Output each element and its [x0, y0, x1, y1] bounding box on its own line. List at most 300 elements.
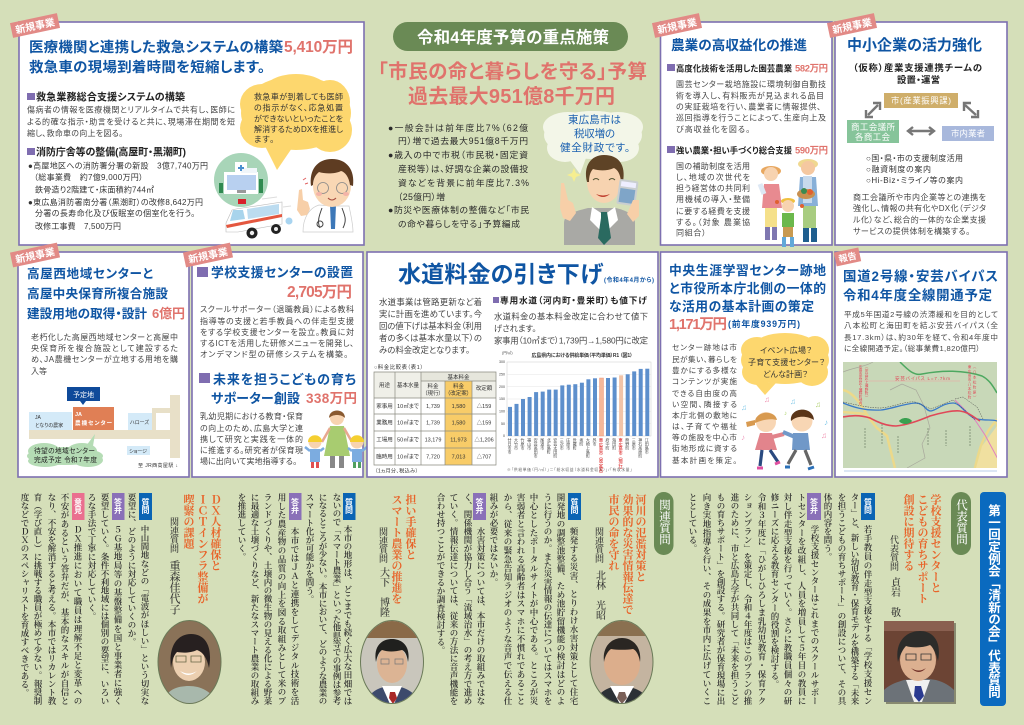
table: rate comparison: （現行）	[425, 389, 441, 397]
heading: (令和4年4月から)	[604, 276, 654, 284]
text: body columns: ろな手法で丁寧に対応していく。	[86, 493, 97, 620]
column article: DX talent and ICT	[20, 492, 222, 706]
question badge: 質問	[570, 497, 579, 514]
text block: スクールサポーター（退職教員）による教科	[200, 304, 354, 314]
bar chart: unit supply price: ※「供給単価（円/㎥）」＝「給水収益（水道料金収入）」/「有収水量」	[507, 467, 632, 472]
text block	[379, 297, 483, 355]
diagram: partnership: 商工会議所	[851, 122, 896, 132]
text: body columns: 頻発する災害、とりわけ水害対策として住宅	[569, 526, 579, 705]
table: rate comparison: 料金	[427, 382, 439, 390]
text block: horticulture	[667, 62, 828, 134]
text block: horticulture: の実証栽培を行い、農業者に情報提供、	[676, 102, 821, 112]
text: body columns: 用した農産物の品質の向上を図る取組みとして米のブ	[276, 493, 287, 705]
question badge	[343, 493, 356, 520]
badge: new project	[827, 13, 877, 38]
table: rate comparison: 基本料金	[447, 373, 470, 381]
bar chart: unit supply price: 坂町	[579, 437, 584, 446]
bar chart: unit supply price: 大崎上島町	[586, 437, 591, 458]
heading: 水道料金の引き下げ	[398, 261, 604, 287]
text block: private water: げされます。	[494, 324, 536, 334]
text block: 民が集い、暮らしを	[672, 354, 737, 364]
text block: に全線開通予定。（総事業費1,820億円）	[844, 343, 980, 353]
text block: 実に計画を進めています。今	[379, 309, 483, 319]
text block: fire stations: 改修工事費 7,500万円	[35, 221, 121, 231]
text block: 乳幼児期における教育・保育	[200, 411, 303, 421]
heading: 高屋中央保育所複合施設	[27, 286, 168, 301]
text block: 八本松町と海田町を結ぶ安芸バイパス（全	[844, 320, 998, 330]
text block: support system: 縮し、救命車の向上を図る。	[27, 128, 123, 138]
bar chart: unit supply price: 福山市	[527, 437, 532, 451]
map: bypass route: 広島市安芸区上瀬野町地内	[858, 365, 863, 406]
text block: 平成5年国道2号線の渋滞緩和を目的として	[844, 309, 998, 319]
title and name	[888, 493, 942, 618]
column article: school support question	[688, 492, 971, 706]
heading: child-rearing supporter	[199, 372, 357, 406]
text block: horticulture: 高度化技術を活用した園芸農業	[676, 64, 793, 74]
text block	[200, 411, 303, 466]
photo: Sadaiwa	[884, 621, 956, 704]
title and name: 効果的な災害情報伝達で	[621, 493, 634, 615]
heading: emergency system	[29, 38, 353, 76]
text: body columns: 害弱者と言われる高齢者はスマホに不慣れであること	[515, 492, 526, 705]
heading: school support center: 2,705万円	[287, 284, 352, 301]
text: body columns: 本市ではＪＡと連携をしてデジタル技術を活	[290, 526, 300, 706]
text block: farm support: 強い農業・担い手づくり総合支援	[676, 146, 793, 156]
illustration: dancing children	[741, 395, 828, 469]
text block: をする学校支援センターを設立。教員に対	[200, 327, 354, 337]
list: support: ○融資制度の案内	[866, 164, 931, 174]
table: rate comparison: 改定額	[476, 384, 493, 392]
heading: child-rearing supporter: サポーター創設	[211, 391, 300, 406]
heading: な活用の基本計画の策定	[669, 299, 814, 314]
subheading	[853, 62, 982, 85]
text: body columns: ととしている。	[688, 493, 698, 552]
bullet list	[388, 122, 529, 229]
text block: farm support: 同組合）	[676, 228, 706, 238]
question badge: 質問	[141, 497, 150, 514]
text: body columns	[688, 492, 873, 706]
badge: new project	[10, 243, 60, 267]
bar chart: unit supply price: 海田町	[612, 437, 617, 450]
bullet list: 資などを背景に前年度比7.3%	[398, 177, 529, 188]
text: body columns: に最適な土壌づくりなど、新たなスマート農業の取組み	[250, 493, 260, 705]
heading: 高屋西地域センターと	[27, 266, 153, 281]
panel: lifelong learning center	[660, 252, 832, 477]
title and name: 大下 博隆	[378, 566, 390, 618]
heading: 中小企業の活力強化	[847, 36, 982, 54]
bullet list: ●防災や医療体制の整備など「市民	[388, 204, 529, 215]
text block: farm support: 国の補助制度を活用	[676, 161, 750, 171]
title and name: 貞岩 敬	[888, 576, 900, 618]
pill: related question: 関連質問	[658, 499, 671, 546]
map: planned site: 農機センター	[75, 419, 112, 427]
subheading: 設置・運営	[897, 74, 940, 85]
speech bubble: healthy finance: 税収増の	[574, 127, 615, 140]
text block: 商工会議所や市内企業等との連携を	[853, 192, 987, 202]
text: body columns: 不安があるという答弁だが、基本的なスキルが自信と	[60, 493, 70, 705]
table: rate comparison: 50㎥まで	[397, 436, 420, 444]
callout: completion: 完成予定 令和７年度	[34, 455, 97, 464]
list: support: ○国・県・市の支援制度活用	[866, 153, 963, 163]
illustration: dancing children: ♪	[741, 433, 745, 442]
text: body columns: 本市の地形は、どこまでも続く広大な田畑では	[343, 524, 353, 705]
table: rate comparison: （1ヵ月分、税込み）	[375, 466, 418, 474]
table: rate comparison: △159	[477, 418, 491, 426]
speech bubble: what plan	[741, 333, 829, 395]
diagram: partnership: 市(産業振興課)	[891, 96, 951, 106]
bar chart: unit supply price: 安芸太田町	[553, 438, 558, 458]
text: body columns: うに行うのか。また災害情報の伝達についてはスマホを	[543, 492, 553, 705]
title and name	[594, 493, 646, 621]
speech bubble: healthy finance	[543, 111, 643, 174]
speech bubble: what plan: どんな計画？	[763, 369, 808, 379]
bar chart: unit supply price: 熊野町	[625, 437, 630, 450]
text block: 入等	[31, 366, 47, 376]
bar chart: unit supply price: 250	[499, 372, 505, 376]
text block: farm support: する。（対象 農業協	[676, 217, 750, 227]
photo: Shigemori	[158, 620, 222, 704]
text block: するICTを活用した研修メニューを開発し、	[200, 338, 354, 348]
answer badge	[289, 493, 302, 520]
list: support	[866, 153, 963, 185]
illustration: dancing children: ♫	[741, 403, 747, 412]
answer badge	[473, 493, 486, 520]
photo: Kitabayashi	[590, 620, 654, 704]
text: body columns: 令和３年度に「ひがしひろしま乳幼児教育・保育アク	[757, 492, 767, 705]
text: body columns: 要望していく。条件不利地域には個別の要望に、いろい	[100, 492, 110, 705]
text block: horticulture: 582万円	[795, 62, 828, 74]
illustration: dancing children: ♪	[784, 411, 787, 417]
text: body columns: ＤＸ推進において職員は理解不足と変革への	[73, 525, 83, 705]
text block: みの料金改定となります。	[379, 345, 470, 355]
bar chart: unit supply price: 廿日市市	[508, 437, 512, 455]
text block: farm support: 590万円	[795, 144, 828, 156]
bar chart: unit supply price: 安芸高田市	[534, 438, 539, 459]
badge: new project: 新規事業	[187, 245, 229, 266]
text: body columns: 中心としたポータルサイトが中心である。ところが災	[528, 492, 539, 706]
badge: report: 報告	[838, 250, 857, 264]
bar chart: unit supply price: 北広島町	[547, 437, 552, 454]
illustration: farming family	[760, 159, 818, 247]
text block: fire stations: ●高屋地区への消防署分署の新設 3億7,740万円	[28, 160, 208, 170]
text block: farm support: 用機械の導入・整備	[676, 194, 750, 204]
text: body columns: 中山間地などの「電波がほしい」という切実な	[140, 524, 150, 705]
bar chart: unit supply price: 150	[499, 397, 505, 401]
title and name: 関連質問	[168, 517, 179, 554]
pill: related question	[654, 492, 674, 555]
section: budget overview	[378, 22, 647, 245]
text block: め、JA農機センターが立地する用地を購	[31, 354, 178, 364]
text: body columns: 体的内容を問う。	[823, 492, 833, 561]
text block: の向上のため、広島大学と連	[200, 423, 303, 433]
text: body columns: 要望に、どのように対応していくのか。	[126, 492, 137, 646]
map: bypass route	[843, 362, 999, 472]
table: rate comparison: 13,179	[425, 438, 441, 444]
text: body columns: 育（学び直し）に挑戦する職員が極めて少ない。報奨制	[33, 492, 43, 705]
text: body columns: 修ニーズに応える教育センター的役割を検討する。	[769, 492, 780, 688]
text: body columns: く、関係機関が協力し合う「流域治水」の考え方で進め	[463, 493, 473, 705]
text block: 豊かにする多様な	[672, 365, 738, 375]
text block: 等の施設を中心市	[672, 432, 737, 442]
text block: fire stations	[27, 146, 208, 231]
illustration: dancing children: ♫	[815, 400, 821, 409]
text block	[31, 332, 178, 376]
heading	[27, 266, 185, 321]
table: rate comparison: 7,013	[452, 454, 465, 460]
column article: agriculture question	[237, 493, 424, 706]
question badge	[139, 493, 152, 520]
text: body columns: 若手教員の伴走型支援をする「学校支援セン	[863, 524, 873, 705]
heading: school support center: 学校支援センターの設置	[211, 265, 353, 280]
bullet list: ●一般会計は前年度比7%（62億	[388, 122, 528, 133]
illustration: official with calculator	[560, 155, 639, 245]
text block: farm support	[667, 144, 828, 238]
text block: 水道事業は管路更新など着	[379, 297, 482, 307]
bar chart: unit supply price: (円/㎥)	[502, 350, 513, 355]
text block: support system: よる的確な指示・助言を受けると共に、現場滞在期間を短	[27, 116, 235, 126]
badge: new project: 新規事業	[831, 15, 873, 37]
text block: private water: 水道料金の基本料金改定に合わせて値下	[494, 312, 648, 322]
photo: Oshita	[360, 620, 424, 704]
text: body columns: ないので「スマート農業」といった他県等での事例は参考	[332, 493, 342, 706]
text: body columns: 水害対策については、本市だけの取組みではな	[476, 526, 486, 705]
text: body columns: 向き実地指導を行い、その成果を市内に広げていくこ	[702, 492, 712, 705]
heading: (前年度939万円)	[728, 318, 800, 329]
speech bubble: DX: ます。	[254, 135, 274, 144]
text: body columns: ていく。情報伝達については、従来の方法に音声機能を	[449, 493, 459, 705]
text: body columns: 学校支援センターはこれまでのスクールサポー	[810, 524, 820, 705]
bar chart: unit supply price: 江田島市	[645, 437, 650, 455]
heading: 中央生涯学習センター跡地	[669, 263, 826, 278]
column article: river flooding	[436, 492, 674, 706]
text block: 指導等の支援と若手教員への伴走型支援	[200, 316, 354, 326]
heading: emergency system: 5,410万円	[284, 39, 353, 56]
speech bubble: what plan: イベント広場？	[760, 345, 812, 355]
text: body columns: 度などでＤＸのスペシャリストを育成すべきである。	[20, 492, 30, 697]
icon: ambulance	[226, 197, 292, 238]
headline: 過去最大951億8千万円	[408, 85, 615, 108]
text: body columns: スマート化が可能かを問う。	[305, 493, 315, 604]
table: rate comparison: ○料金比較表（表1）	[374, 363, 423, 371]
badge: new project: 新規事業	[14, 245, 56, 266]
title and name: 関連質問	[378, 527, 388, 564]
text: body columns: 合わせ持つことができるか調査検討する。	[436, 492, 446, 654]
text block: support system	[27, 90, 235, 138]
text block: 長17.3km）は、約30年を経て、令和4年度中	[844, 332, 998, 342]
title and name: 市民の命を守れ	[607, 493, 620, 571]
text block: に推進する。研究者が保育現	[200, 445, 303, 455]
title and name: ＩＣＴインフラ整備が	[196, 494, 208, 604]
map: planned site: JA	[75, 412, 82, 418]
text block: コンテンツが実施	[672, 376, 737, 386]
banner: question header: 第一回定例会「清新の会」代表質問	[986, 503, 1000, 698]
answer badge: 答弁	[290, 497, 300, 515]
bullet list: の命や暮らしを守る」予算編成	[398, 218, 520, 229]
question badge: 質問	[344, 497, 354, 514]
text block: できる自由度の高	[672, 388, 737, 398]
answer badge: 答弁	[114, 497, 122, 515]
table: rate comparison: 臨時用	[376, 452, 393, 460]
bar chart: unit supply price: 東広島市（現行）	[618, 437, 624, 472]
text block: 強化し、情報の共有化やDX化（デジタ	[853, 203, 986, 213]
text block: オンデマンド型の研修システムを構築。	[200, 349, 348, 359]
map: bypass route: （八本松町原）	[972, 365, 977, 399]
heading: と市役所本庁北側の一体的	[669, 281, 826, 296]
table: rate comparison: （改定案）	[447, 389, 470, 397]
badge: new project: 新規事業	[14, 15, 56, 37]
text block: horticulture: 巡回指導を行うことによって、生産向上及	[676, 113, 826, 123]
text: body columns: から、従来の緊急告知ラジオのような音声で伝える仕	[503, 493, 513, 706]
subheading: （仮称）産業支援連携チームの	[853, 62, 982, 73]
text block: private water: 家事用（10㎥まで）1,739円→1,580円に改定	[494, 336, 648, 346]
text block: ル化）など、総合的一体的な企業支援	[853, 214, 986, 224]
text: body columns: ションプラン」を策定し、令和４年度はこのプランの推	[743, 493, 753, 706]
bar chart: unit supply price: 庄原市	[566, 438, 571, 451]
text block: 本庁北側の敷地に	[672, 410, 737, 420]
text: body columns: ター」と、新しい幼児教育・保育モデルを構築する「未来	[850, 493, 860, 706]
heading: 6億円	[152, 306, 185, 321]
map: bypass route: 東広島市八本松町	[967, 364, 972, 400]
table: rate comparison: 基本水量	[397, 381, 419, 389]
callout: completion: 待望の地域センター	[34, 446, 95, 455]
list: support: ○Hi-Biz・ミライノ等の案内	[866, 175, 963, 185]
bar chart: unit supply price: 200	[499, 385, 505, 389]
table: rate comparison: 1,580	[452, 420, 465, 426]
text block: 場に出向いて実地指導する。	[200, 456, 297, 466]
title and name: 創設に期待する	[902, 493, 914, 571]
answer badge: 答弁	[810, 497, 818, 515]
table: rate comparison: 7,720	[426, 454, 440, 460]
pill: representative question: 代表質問	[955, 498, 968, 546]
bar chart: unit supply price: 尾道市	[540, 437, 545, 451]
text block: horticulture: び高収益化を図る。	[676, 124, 750, 134]
text block	[844, 309, 998, 353]
panel: agriculture	[652, 13, 832, 247]
icon: hospital	[214, 153, 268, 207]
speech bubble: DX: の指示がなく、応急処置	[254, 102, 343, 112]
illustration: dancing children: ♪	[824, 418, 828, 427]
speech bubble: DX: 救急車が到着しても医師	[254, 92, 343, 102]
map: planned site	[29, 387, 180, 469]
text block: fire stations: 消防庁舎等の整備(高屋町・黒潮町)	[36, 146, 186, 158]
bar chart: unit supply price: 呉市	[592, 438, 598, 447]
question badge	[861, 493, 875, 520]
title and name: スマート農業の推進を	[390, 494, 402, 604]
title and name: 担い手確保と	[404, 493, 416, 560]
illustration: dancing children: ♫	[821, 431, 827, 440]
headline	[378, 60, 647, 108]
text block: farm support: 担う経営体の共同利	[676, 183, 750, 193]
badge: report	[834, 247, 861, 266]
map: planned site: ハローズ	[130, 419, 149, 426]
text block: support system: 救急業務総合支援システムの構築	[36, 90, 185, 104]
diagram: partnership: 各商工会	[855, 132, 891, 142]
heading pill: 令和4年度予算の重点施策	[417, 27, 610, 47]
bar chart: unit supply price: 50	[501, 422, 505, 426]
heading: 令和4年度全線開通予定	[843, 287, 992, 303]
panel: small business	[827, 13, 1007, 245]
table: rate comparison: 用途	[379, 382, 390, 389]
illustration: dancing children: ♫	[790, 397, 796, 406]
badge: new project	[183, 243, 233, 267]
title and name: 北林 光昭	[594, 570, 606, 621]
text: body columns: トセンターを改組し、人員を増員して５年目の教員に	[797, 493, 807, 705]
bar chart: unit supply price: 大竹市	[514, 437, 519, 451]
text block: fire stations: 分署の長寿命化及び仮眠室の個室化を行う。	[35, 208, 195, 218]
bar chart: unit supply price: 広島県内における供給単価（平均単価）R1 （図1）	[532, 352, 632, 359]
badge: new project	[10, 13, 60, 38]
text block: サービスの提供体制を構築する。	[853, 226, 970, 236]
speech bubble: healthy finance: 東広島市は	[568, 113, 621, 126]
text: body columns: になるところが少ない。本市において、どのような農業の	[318, 493, 328, 705]
text: body columns	[436, 492, 579, 706]
text block: センター跡地は市	[672, 342, 737, 352]
text block: 携して研究と実践を一体的	[200, 434, 303, 444]
text: body columns: を推進していく。	[237, 493, 247, 561]
title and name: 重森佳代子	[168, 559, 180, 615]
heading: 農業の高収益化の推進	[671, 37, 807, 53]
map: planned site: となりの農家	[35, 422, 63, 429]
table: rate comparison: 家事用	[376, 402, 393, 410]
text block: い空間、隣接する	[672, 399, 737, 409]
bar chart: unit supply price: 府中町	[606, 438, 610, 450]
map: bypass route: 安芸バイパス L=7.7km	[895, 375, 950, 382]
speech bubble: what plan: 子育て支援センター？	[748, 357, 825, 367]
speech bubble: DX: ができないといったことを	[254, 114, 344, 124]
map: planned site: 至 JR西高屋駅 ↓	[138, 462, 178, 469]
text: body columns: 進のために、市と広島大学が共同して「未来を担うこど	[730, 492, 740, 705]
map: bypass route: （安芸区上瀬野町）	[864, 365, 869, 399]
heading	[669, 263, 826, 333]
text block: farm support: に要する経費を支援	[676, 206, 750, 216]
bar chart: unit supply price: 神石高原町	[638, 437, 643, 458]
text block: fire stations: （総事業費 約7億9,000万円）	[34, 172, 143, 182]
table: rate comparison: 1,580	[452, 404, 465, 410]
table: rate comparison	[374, 363, 496, 474]
answer badge	[807, 493, 821, 520]
bar chart: unit supply price: 三次市	[560, 438, 565, 451]
headline: 「市民の命と暮らしを守る」予算	[378, 60, 647, 83]
table: rate comparison: 料金	[453, 382, 464, 390]
title and name: ＤＸ人材確保と	[209, 494, 222, 571]
question badge: 質問	[864, 497, 872, 514]
text block: 基本計画を策定。	[672, 455, 737, 465]
panel: water rates	[367, 252, 658, 477]
panel: emergency system	[10, 13, 364, 245]
text: body columns	[237, 493, 353, 706]
text block: は、子育てや福祉	[672, 421, 737, 431]
answer badge	[112, 493, 124, 520]
text block: 者の多くは基本水量以下）の	[379, 333, 482, 343]
answer badge: 答弁	[475, 497, 484, 515]
bar chart: unit supply price: 竹原市	[520, 437, 526, 451]
speech bubble: healthy finance: 健全財政です。	[560, 141, 630, 154]
title and name: 学校支援センターと	[929, 493, 942, 593]
pill: representative question	[951, 492, 971, 555]
title and name	[168, 493, 222, 615]
text block: horticulture: 園芸センター栽培施設に環境制御自動技	[676, 79, 826, 89]
title and name: 喫緊の課題	[182, 493, 194, 550]
panel: national route 2 bypass	[834, 247, 1007, 477]
table: rate comparison: △707	[477, 452, 491, 460]
text block	[200, 304, 354, 359]
table: rate comparison: 業務用	[376, 418, 393, 426]
heading: 国道2号線・安芸バイパス	[843, 268, 998, 284]
question badge	[568, 493, 581, 520]
table: rate comparison: 工場用	[376, 436, 393, 444]
text: body columns: 対し伴走型支援を行っていく。さらに教職員個々の研	[783, 492, 793, 706]
illustration: teacher and children	[305, 410, 367, 468]
